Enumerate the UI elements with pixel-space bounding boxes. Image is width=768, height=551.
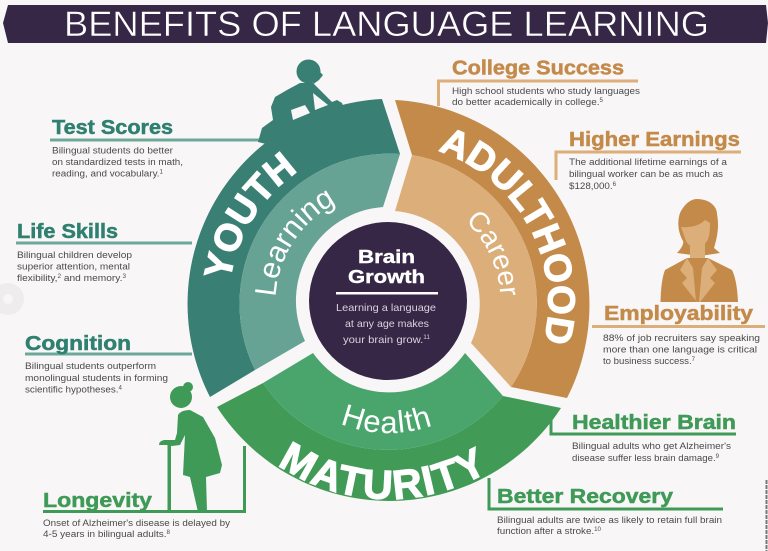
watermark gear bbox=[0, 283, 24, 315]
callout: test scores: on standardized tests in math, bbox=[52, 157, 183, 168]
callout: test scores bbox=[52, 117, 183, 180]
icon: elderly woman with cane bbox=[159, 382, 222, 512]
label: Learning: Learning bbox=[255, 190, 336, 295]
callout: cognition: monolingual students in forming bbox=[25, 373, 168, 384]
callout: longevity bbox=[43, 490, 230, 540]
panel: adulthood segment bbox=[395, 100, 590, 398]
label: MATURITY: MATURITY bbox=[278, 441, 480, 500]
callout: better recovery: Bilingual adults are twice as likely to retain full brain bbox=[497, 515, 722, 526]
callout: cognition bbox=[25, 333, 168, 396]
callout: better recovery: 10 bbox=[594, 527, 602, 533]
callout: life skills: Life Skills bbox=[17, 221, 118, 243]
panel: brain growth centre: Brain bbox=[358, 247, 415, 267]
title banner: BENEFITS OF LANGUAGE LEARNING bbox=[64, 5, 709, 44]
callout: cognition: Cognition bbox=[25, 333, 131, 355]
callout: employability: 7 bbox=[692, 357, 696, 363]
panel: brain growth centre: 11 bbox=[423, 335, 431, 341]
callout: college success: 5 bbox=[600, 98, 604, 104]
callout: college success: do better academically in college. bbox=[452, 97, 594, 108]
label: YOUTH: YOUTH bbox=[203, 151, 297, 276]
callout: employability: 88% of job recruiters say speaking bbox=[603, 333, 760, 344]
callout: healthier brain: 9 bbox=[716, 454, 720, 460]
callout: employability: more than one language is critical bbox=[603, 344, 757, 356]
panel: brain growth centre: at any age makes bbox=[345, 318, 429, 330]
credit strip bbox=[766, 480, 768, 551]
callout: higher earnings: 6 bbox=[613, 182, 617, 188]
callout: test scores: Bilingual students do better bbox=[52, 146, 174, 156]
callout: better recovery bbox=[497, 486, 722, 537]
callout: higher earnings: bilingual worker can be as much as bbox=[569, 169, 723, 180]
callout: cognition: scientific hypotheses. bbox=[25, 384, 116, 396]
callout: cognition: 4 bbox=[119, 386, 123, 392]
label: Health: Health bbox=[342, 404, 431, 434]
callout: higher earnings bbox=[569, 129, 740, 192]
callout: healthier brain: Healthier Brain bbox=[572, 412, 736, 434]
panel: maturity segment bbox=[217, 353, 561, 501]
callout: employability: to business success. bbox=[603, 356, 692, 367]
callout: life skills: and memory. bbox=[61, 273, 122, 284]
callout: healthier brain: disease suffer less brain damage. bbox=[572, 453, 715, 464]
callout: employability: Employability bbox=[604, 303, 754, 325]
callout: longevity: Onset of Alzheimer's disease is delayed by bbox=[43, 518, 230, 529]
callout: life skills bbox=[17, 221, 132, 284]
callout: higher earnings: $128,000. bbox=[569, 181, 612, 192]
callout: better recovery: function after a stroke. bbox=[497, 526, 592, 537]
callout: life skills: 3 bbox=[122, 274, 127, 280]
callout: college success: High school students who study languages bbox=[452, 86, 640, 97]
callout: test scores: reading, and vocabulary. bbox=[52, 168, 156, 180]
connector lines bbox=[16, 81, 765, 512]
panel: brain growth centre: Learning a language bbox=[336, 302, 436, 314]
label: Career: Career bbox=[470, 212, 516, 295]
callout: healthier brain bbox=[572, 412, 736, 464]
callout: healthier brain: Bilingual adults who get Alzheimer's bbox=[572, 441, 731, 452]
callout: higher earnings: The additional lifetime earnings of a bbox=[569, 157, 728, 168]
callout: employability bbox=[603, 303, 760, 367]
callout: longevity: Longevity bbox=[43, 490, 153, 512]
callout: better recovery: Better Recovery bbox=[497, 486, 674, 508]
callout: longevity: 4-5 years in bilingual adults. bbox=[43, 529, 162, 540]
panel: brain growth centre: your brain grow. bbox=[343, 334, 418, 346]
callout: longevity: 8 bbox=[167, 530, 171, 536]
icon: crawling baby bbox=[258, 60, 345, 145]
panel: brain growth centre bbox=[309, 222, 467, 380]
callout: cognition: Bilingual students outperform bbox=[25, 361, 156, 372]
callout: life skills: flexibility, bbox=[17, 273, 55, 284]
callout: college success bbox=[452, 58, 640, 108]
callout: higher earnings: Higher Earnings bbox=[569, 129, 740, 151]
callout: college success: College Success bbox=[452, 58, 624, 80]
panel: youth segment bbox=[188, 99, 400, 397]
label: ADULTHOOD: ADULTHOOD bbox=[438, 130, 576, 344]
panel: brain growth centre: Growth bbox=[348, 267, 425, 287]
callout: test scores: Test Scores bbox=[52, 117, 173, 139]
callout: test scores: 1 bbox=[160, 170, 164, 176]
callout: life skills: Bilingual children develop bbox=[17, 250, 132, 261]
callout: life skills: superior attention, mental bbox=[17, 262, 130, 272]
callout: life skills: 2 bbox=[58, 274, 62, 280]
icon: businesswoman bbox=[660, 199, 738, 302]
